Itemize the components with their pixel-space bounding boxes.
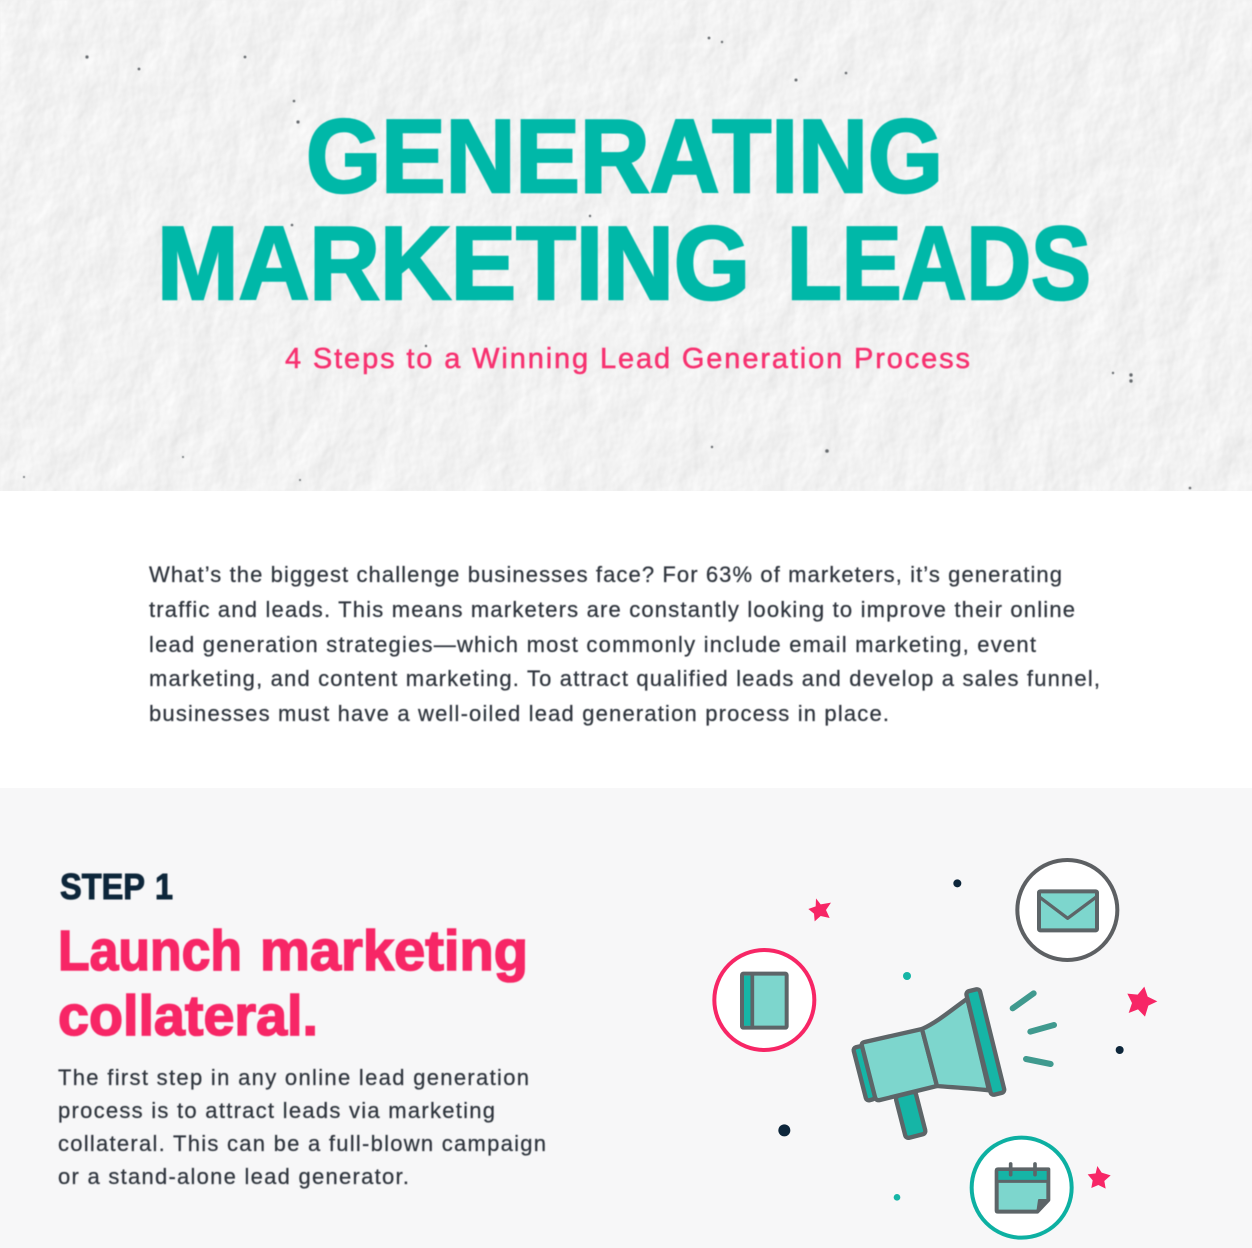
icon: calendar in circle — [972, 1138, 1072, 1238]
step heading — [58, 919, 528, 1048]
intro text block: marketing, and content marketing. To attract qualified leads and develop a sales funnel, — [149, 666, 1100, 691]
icon: stars — [808, 898, 1157, 1189]
step label: 1 — [155, 866, 173, 907]
panel: textured header background — [0, 0, 1252, 491]
step heading: marketing — [260, 919, 528, 983]
step body text: process is to attract leads via marketing — [58, 1098, 495, 1123]
step heading: Launch — [58, 919, 242, 983]
icon: envelope in circle — [1017, 860, 1117, 960]
title — [157, 99, 1091, 322]
subtitle: 4 Steps to a Winning Lead Generation Process — [285, 343, 970, 375]
illustration: megaphone with channels — [714, 860, 1157, 1238]
intro text block: lead generation strategies—which most commonly include email marketing, event — [149, 632, 1036, 657]
icon: book in circle — [714, 950, 814, 1050]
icon: megaphone — [853, 989, 1005, 1139]
title: MARKETING — [157, 206, 750, 322]
panel: intro — [0, 491, 1252, 788]
step heading: collateral. — [58, 984, 318, 1048]
intro text block: businesses must have a well-oiled lead generation process in place. — [149, 701, 889, 726]
icon: dots — [778, 879, 1124, 1201]
step body text — [58, 1065, 546, 1189]
panel: step 1 — [0, 788, 1252, 1248]
icon: sound lines — [1013, 993, 1054, 1064]
intro text block — [149, 562, 1100, 726]
step body text: or a stand-alone lead generator. — [58, 1164, 409, 1189]
title: LEADS — [787, 206, 1091, 322]
step body text: collateral. This can be a full-blown campaign — [58, 1131, 546, 1156]
title: GENERATING — [306, 99, 943, 215]
intro text block: traffic and leads. This means marketers are constantly looking to improve their online — [149, 597, 1075, 622]
step body text: The first step in any online lead generation — [58, 1065, 529, 1090]
intro text block: What’s the biggest challenge businesses face? For 63% of marketers, it’s generating — [149, 562, 1062, 587]
step label: STEP — [60, 866, 145, 907]
